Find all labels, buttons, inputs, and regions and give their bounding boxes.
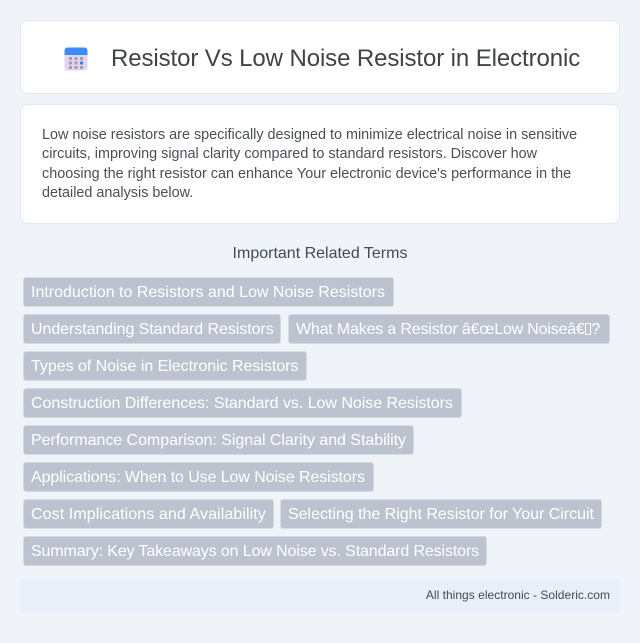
chip: summary [23,536,487,566]
chip: types of noise [23,351,307,381]
chip: selecting [280,499,602,529]
chip: applications: Applications: When to Use Low Noise Resistors [31,469,365,486]
footer text: All things electronic - Solderic.com [426,588,610,602]
chip: applications [23,462,374,492]
chip: cost [23,499,274,529]
footer [20,579,620,613]
chip: summary: Summary: Key Takeaways on Low Noise vs. Standard Resistors [31,543,479,560]
title: Resistor Vs Low Noise Resistor in Electronic [111,45,580,72]
chip: what makes low noise [288,314,610,344]
chip: performance comparison: Performance Comparison: Signal Clarity and Stability [31,432,406,449]
chip: standard resistors: Understanding Standard Resistors [31,321,274,338]
intro paragraph: choosing the right resistor can enhance Your electronic device's performance in the [42,166,571,182]
chip: construction differences: Construction Differences: Standard vs. Low Noise Resistors [31,395,453,412]
chip: what makes low noise: What Makes a Resistor â€œLow Noiseâ€ ? [296,321,600,338]
chip: performance comparison [23,425,414,455]
chip: construction differences [23,388,462,418]
intro paragraph [42,127,577,201]
panel: title card [20,20,620,94]
panel: intro text [20,104,620,224]
heading: related terms: Important Related Terms [233,245,407,262]
icon: calendar [64,48,88,70]
intro paragraph: detailed analysis below. [42,185,193,201]
intro paragraph: Low noise resistors are specifically designed to minimize electrical noise in sensitive [42,127,577,143]
chip: cost: Cost Implications and Availability [31,506,266,523]
chip: introduction [23,277,394,307]
chip: selecting: Selecting the Right Resistor for Your Circuit [288,506,594,523]
chip: introduction: Introduction to Resistors and Low Noise Resistors [31,284,385,301]
chip: standard resistors [23,314,281,344]
chip: types of noise: Types of Noise in Electronic Resistors [31,358,298,375]
intro paragraph: circuits, improving signal clarity compared to standard resistors. Discover how [42,146,537,162]
